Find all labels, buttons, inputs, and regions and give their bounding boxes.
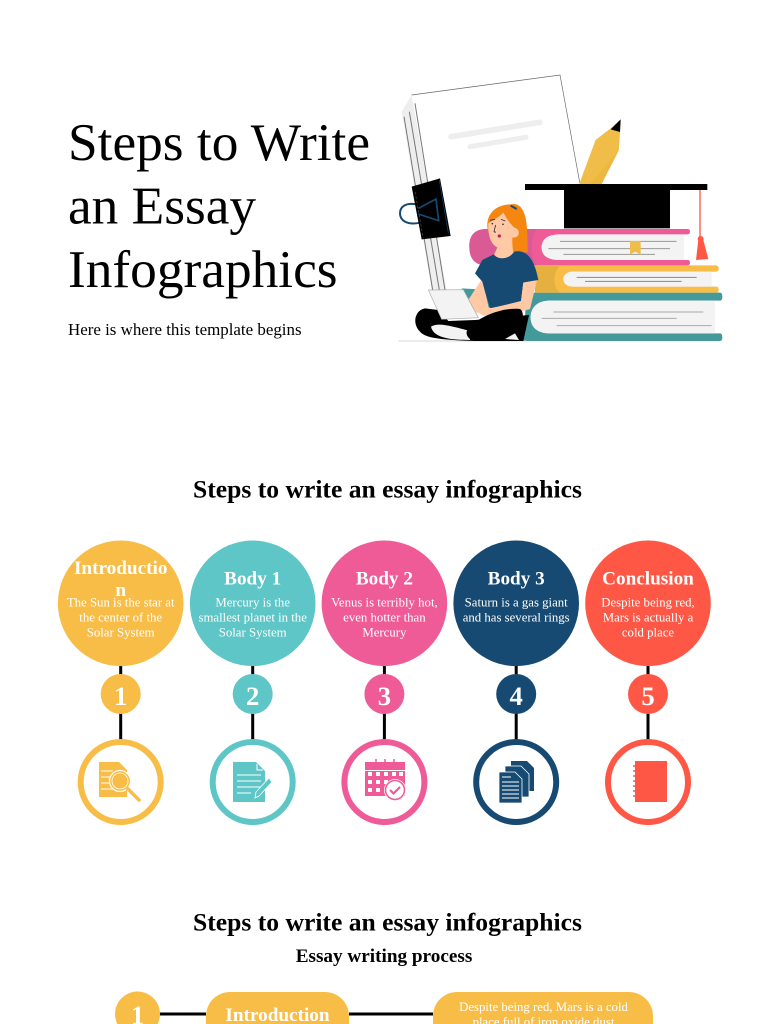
connector lines: [121, 660, 648, 745]
step 2: body 1: [190, 540, 316, 822]
number 3: [364, 674, 404, 714]
icon: binder clip: [400, 178, 451, 239]
subheading: essay writing process: Essay writing process: [296, 946, 472, 967]
number 4: 4: [510, 681, 523, 711]
subtitle: Here is where this template begins: [68, 320, 302, 339]
title: Steps to Write: [68, 112, 370, 172]
icon: pink book: [469, 229, 690, 265]
hair silhouette: [487, 204, 528, 252]
icon: document with magnifier: [81, 742, 161, 822]
face details: [490, 219, 505, 232]
icon: document with pen: [213, 742, 293, 822]
pill: description: [433, 992, 653, 1024]
circle: body 2: [322, 540, 447, 666]
icon: pencil: [579, 119, 621, 184]
step 5: conclusion: [585, 540, 711, 822]
step 1: introduction: [58, 540, 184, 822]
legs: [415, 308, 529, 341]
circle: body 2: Venus is terribly hot,: [331, 596, 438, 610]
circle: body 1: Body 1: [224, 568, 281, 590]
circle: introduction: the center of the: [79, 610, 162, 624]
title: an Essay: [68, 176, 256, 236]
laptop: [428, 290, 478, 319]
number 1 badge: [115, 992, 160, 1024]
illustration: student with books: [398, 75, 722, 341]
number 5: 5: [641, 681, 655, 711]
circle: body 3: Body 3: [488, 568, 545, 590]
shirt: [475, 251, 538, 308]
sock left: [431, 325, 470, 340]
number 1: 1: [114, 681, 127, 711]
circle: body 3: [453, 540, 579, 666]
step 4: body 3: [453, 540, 579, 822]
number 3: 3: [378, 681, 391, 711]
circle: body 1: [190, 540, 316, 666]
pill: introduction: [206, 992, 349, 1024]
circle: body 1: Solar System: [219, 626, 287, 640]
title: [68, 112, 370, 299]
icon: student: [398, 204, 538, 341]
circle: conclusion: Conclusion: [602, 568, 694, 590]
icon: teal book: [462, 288, 722, 341]
number 5: [628, 674, 668, 714]
icon: stacked documents: [476, 742, 556, 822]
circle: body 2: Mercury: [362, 626, 407, 640]
process row: [115, 992, 653, 1024]
circle: conclusion: [585, 540, 711, 666]
pill: description: Despite being red, Mars is a cold: [459, 1000, 628, 1014]
number 1: [101, 674, 141, 714]
number 4: [496, 674, 536, 714]
circle: body 1: Mercury is the: [215, 596, 290, 610]
title: Infographics: [68, 239, 338, 299]
circle: introduction: The Sun is the star at: [67, 596, 175, 610]
circle: conclusion: Mars is actually a: [603, 610, 694, 624]
circle: body 1: smallest planet in the: [198, 610, 307, 624]
icon: yellow book: [535, 265, 719, 293]
circle: body 3: Saturn is a gas giant: [465, 596, 568, 610]
far arm: [475, 280, 537, 316]
circle: introduction: [58, 540, 184, 666]
near arm back: [467, 278, 490, 314]
heading: section 1: Steps to write an essay infographics: [193, 474, 582, 504]
circle: introduction: Solar System: [87, 626, 155, 640]
circle: body 2: Body 2: [356, 568, 413, 590]
number 2: 2: [246, 681, 259, 711]
icon: calendar with check: [344, 742, 424, 822]
icon: graduation cap: [525, 184, 708, 260]
heading: section 2: Steps to write an essay infographics: [193, 908, 582, 936]
face and neck: [488, 212, 519, 258]
icon: notebook: [608, 742, 688, 822]
circle: introduction: n: [115, 580, 126, 601]
near leg: [467, 309, 523, 341]
circle: conclusion: Despite being red,: [601, 596, 695, 610]
number 2: [233, 674, 273, 714]
icon: paper stack: [402, 75, 580, 293]
circle: body 2: even hotter than: [343, 610, 426, 624]
circle: introduction: Introductio: [74, 558, 167, 579]
circle: body 3: and has several rings: [463, 610, 570, 624]
step 3: body 2: [322, 540, 447, 822]
circle: conclusion: cold place: [622, 626, 674, 640]
